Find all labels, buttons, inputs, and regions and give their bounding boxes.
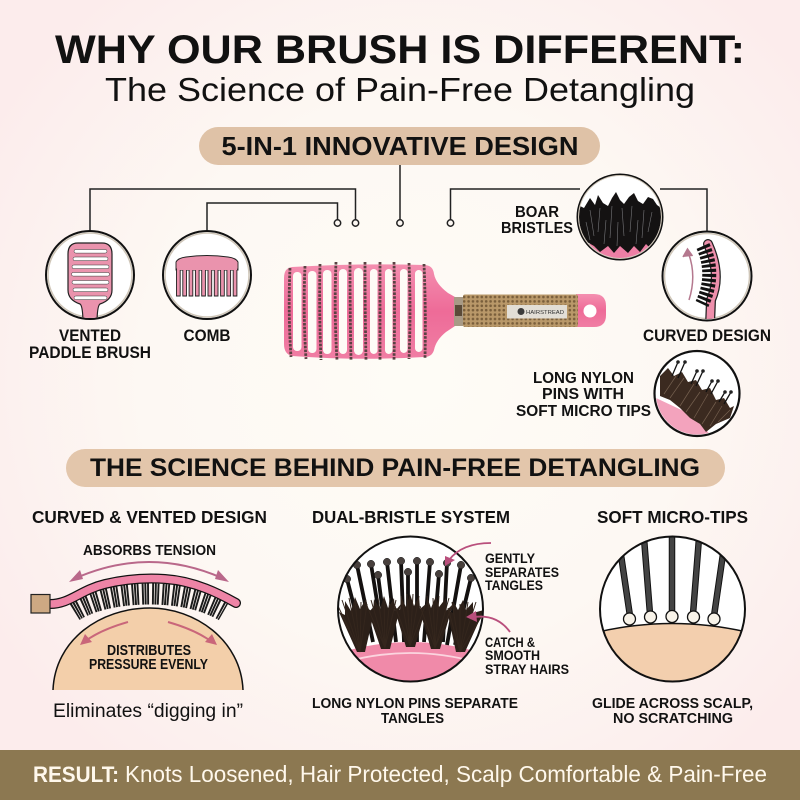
handle logo plate: HAIRSTREAD (526, 310, 564, 316)
heading: soft micro-tips: SOFT MICRO-TIPS (597, 507, 748, 527)
feature: boar bristles (501, 174, 665, 264)
diagram: curved brush band (50, 579, 236, 604)
arrow: catch and smooth (466, 611, 510, 632)
label: curved design: CURVED DESIGN (643, 327, 771, 345)
label: long nylon pins: SOFT MICRO TIPS (516, 403, 651, 420)
arrow: curve direction (683, 249, 693, 300)
feature: long nylon pins (516, 351, 740, 436)
label: distributes pressure evenly: PRESSURE EVENLY (89, 657, 208, 673)
footer: result bar (0, 750, 800, 800)
label: comb: COMB (184, 327, 231, 345)
brush photo (284, 262, 606, 360)
feature: comb (163, 231, 251, 345)
hair tuft masses (339, 594, 484, 652)
arrows: distributes pressure (80, 622, 217, 645)
caption: glide across scalp: GLIDE ACROSS SCALP, (592, 696, 753, 712)
diagram: brush handle (31, 594, 50, 613)
caption: long nylon pins separate tangles: LONG NYLON PINS SEPARATE (312, 696, 518, 712)
panel: soft micro-tips (590, 507, 755, 727)
label: vented paddle brush: VENTED (59, 327, 121, 345)
arrow: absorbs tension (69, 562, 229, 582)
footer: result bar: Knots Loosened, Hair Protected, Scalp Comfortable & Pain-Free (125, 761, 767, 787)
icon: comb (163, 231, 251, 319)
pink handle end (576, 294, 606, 327)
caption: long nylon pins separate tangles: TANGLES (381, 711, 444, 727)
heading: the science behind pain-free detangling (66, 449, 725, 487)
footer: result bar: RESULT: (33, 762, 119, 787)
icon: vented paddle (46, 231, 134, 325)
handle logo plate (507, 305, 567, 318)
heading: dual-bristle system: DUAL-BRISTLE SYSTEM (312, 507, 510, 527)
heading: the science behind pain-free detangling: THE SCIENCE BEHIND PAIN-FREE DETANGLING (90, 454, 700, 482)
caption: glide across scalp: NO SCRATCHING (613, 711, 733, 727)
title: WHY OUR BRUSH IS DIFFERENT: (55, 28, 745, 72)
bristle rows (289, 262, 425, 360)
heading: curved and vented design: CURVED & VENTED DESIGN (32, 507, 267, 527)
panel: curved and vented design (31, 507, 267, 722)
label: gently separates tangles: GENTLY (485, 551, 535, 566)
label: gently separates tangles: TANGLES (485, 578, 543, 593)
label: gently separates tangles: SEPARATES (485, 565, 559, 580)
label: long nylon pins: LONG NYLON (533, 370, 634, 387)
label: catch and smooth stray hairs: SMOOTH (485, 648, 540, 663)
gold handle grip (463, 294, 578, 327)
connector lines (90, 165, 707, 232)
icon: boar bristles (575, 174, 665, 264)
vent slots (293, 268, 422, 355)
feature: vented paddle brush (29, 231, 151, 362)
panel: dual-bristle system (312, 507, 569, 727)
brush head (284, 264, 455, 359)
feature: curved design (643, 232, 771, 345)
metal collar (454, 297, 463, 326)
label: distributes pressure evenly: DISTRIBUTES (107, 643, 191, 659)
diagram: scalp dome (53, 608, 243, 690)
label: long nylon pins: PINS WITH (542, 386, 624, 403)
handle hole (584, 304, 596, 318)
icon: curved design (662, 232, 752, 325)
diagram: dual bristle circle (337, 536, 484, 682)
diagram: soft micro-tips circle (599, 536, 746, 682)
heading: 5-in-1 innovative design: 5-IN-1 INNOVATIVE DESIGN (222, 131, 578, 161)
label: absorbs tension: ABSORBS TENSION (83, 543, 216, 559)
icon: nylon pins (654, 351, 740, 436)
subtitle: The Science of Pain-Free Detangling (105, 71, 695, 108)
label: boar bristles: BOAR (515, 204, 559, 221)
label: catch and smooth stray hairs: STRAY HAIRS (485, 662, 569, 677)
arrow: gently separates tangles (445, 543, 491, 566)
label: vented paddle brush: PADDLE BRUSH (29, 344, 151, 362)
label: catch and smooth stray hairs: CATCH & (485, 635, 535, 650)
diagram: bristles (74, 594, 224, 611)
heading: 5-in-1 innovative design (199, 127, 600, 165)
label: boar bristles: BRISTLES (501, 220, 573, 237)
text: eliminates digging in: Eliminates “digging in” (53, 701, 243, 722)
